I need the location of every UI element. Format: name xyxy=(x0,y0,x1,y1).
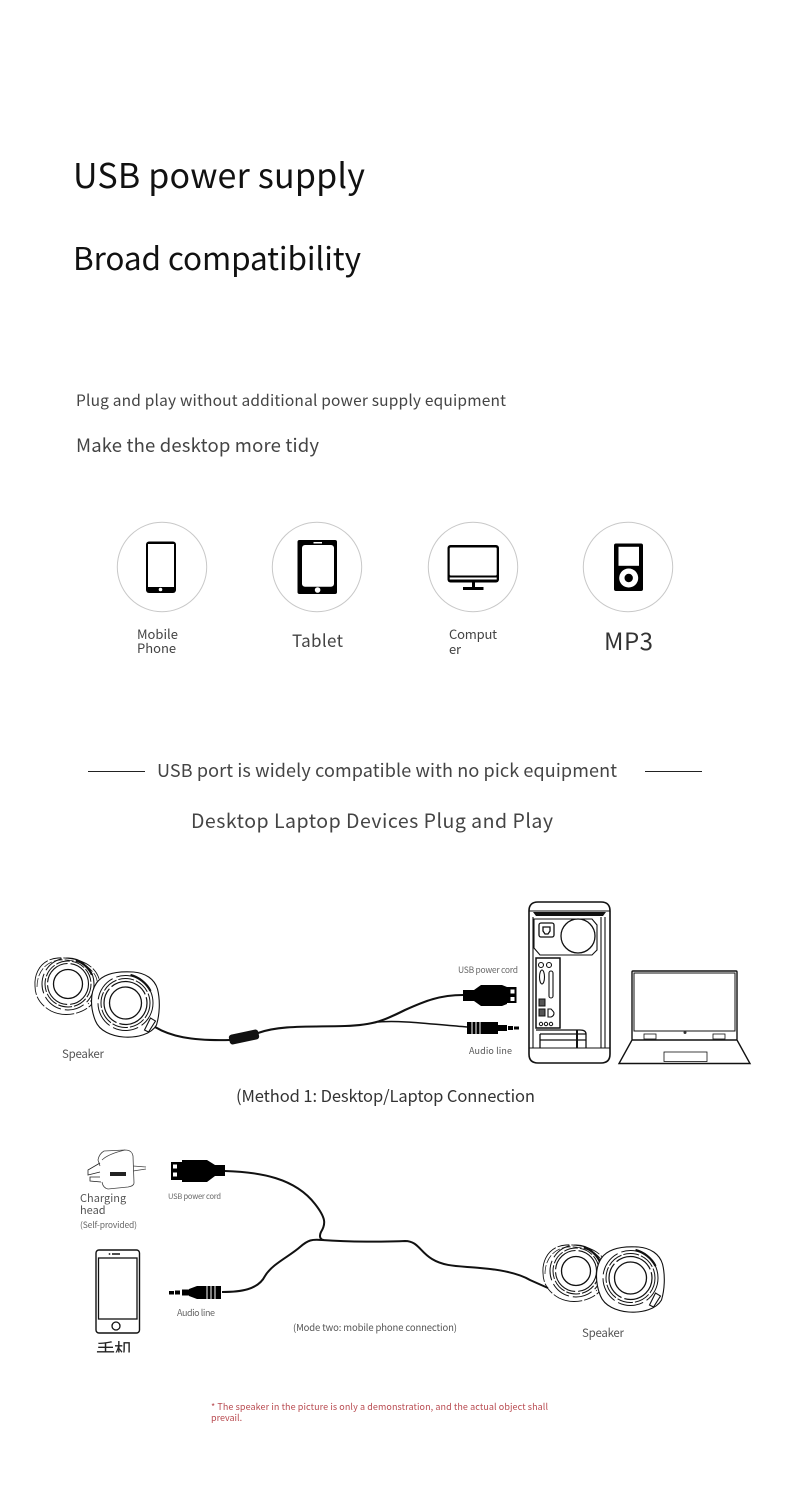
heading: USB port compatibility: USB port is widely compatible with no pick equipment xyxy=(157,757,617,783)
label: tablet: Tablet xyxy=(292,627,344,652)
label: USB power cord: USB power cord xyxy=(168,1191,221,1202)
icon: smartphone xyxy=(96,1250,140,1333)
label: speaker: Speaker xyxy=(582,1325,625,1341)
text: plug and play: Plug and play without additional power supply equipment xyxy=(76,389,506,411)
label: audio line: Audio line xyxy=(469,1044,512,1057)
diagram: method 1 xyxy=(35,902,750,1064)
icon: phone xyxy=(146,542,176,593)
caption: method 1: (Method 1: Desktop/Laptop Connection xyxy=(236,1083,535,1107)
icon: USB plug xyxy=(171,1160,225,1182)
label: charging head: head xyxy=(80,1202,106,1218)
label: speaker: Speaker xyxy=(62,1046,105,1062)
icon: desktop tower xyxy=(529,902,610,1063)
label: audio line: Audio line xyxy=(177,1306,215,1319)
cable xyxy=(155,995,467,1045)
diagram: mode 2 xyxy=(80,1150,664,1363)
label: MP3: MP3 xyxy=(604,622,653,657)
label: self-provided: (Self-provided) xyxy=(80,1219,137,1231)
caption: mode 2: (Mode two: mobile phone connection) xyxy=(293,1320,457,1334)
device: MP3 xyxy=(583,522,673,657)
icon: tablet xyxy=(298,540,337,594)
heading: plug and play: Desktop Laptop Devices Plug and Play xyxy=(191,805,553,834)
disclaimer: prevail. xyxy=(211,1411,242,1424)
text: tidy desktop: Make the desktop more tidy xyxy=(76,432,319,458)
heading: Broad compatibility: Broad compatibility xyxy=(73,234,361,280)
icon: audio jack xyxy=(467,1022,519,1034)
label: USB power cord: USB power cord xyxy=(458,964,518,976)
icon: mp3 player xyxy=(614,544,643,591)
label: mobile phone: Mobile xyxy=(137,624,178,643)
device: mobile phone xyxy=(117,522,207,657)
label: computer: er xyxy=(449,639,462,658)
label: mobile phone: Phone xyxy=(137,638,176,657)
device: tablet xyxy=(272,522,362,652)
label: phone (cropped): 手机 xyxy=(96,1336,133,1363)
icon: speakers xyxy=(35,958,159,1037)
icon: audio jack xyxy=(169,1286,221,1299)
disclaimer: * The speaker in the picture is only a demonstration, and the actual object shall xyxy=(211,1400,548,1413)
device: computer xyxy=(428,522,518,658)
icon: monitor xyxy=(448,545,499,590)
cable xyxy=(222,1171,548,1292)
label: computer: Comput xyxy=(449,624,497,643)
icon: charging head xyxy=(88,1150,146,1189)
icon: laptop xyxy=(619,971,750,1064)
icon: speakers xyxy=(543,1245,664,1312)
title: USB power supply: USB power supply xyxy=(73,149,365,198)
label: charging head: Charging xyxy=(80,1190,127,1206)
icon: USB plug xyxy=(463,985,516,1006)
